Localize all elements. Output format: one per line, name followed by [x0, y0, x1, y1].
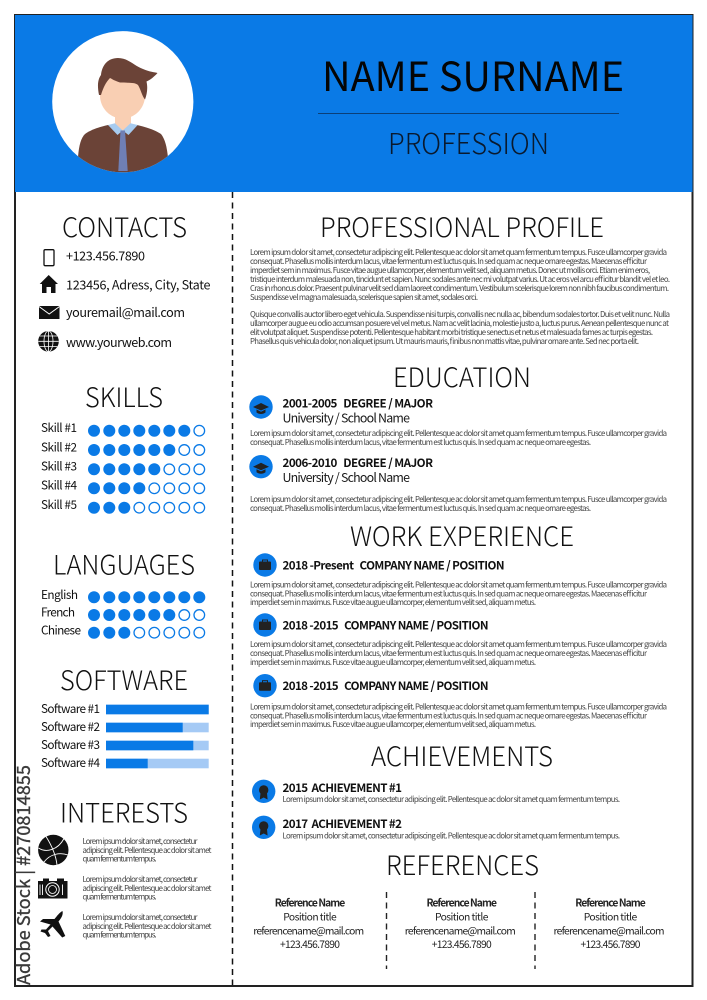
- reference 3: Reference Name: [575, 894, 646, 910]
- reference divider 1: [386, 892, 388, 969]
- job entry 1: consequat. Phasellus mollis interdum lacus, vitae fermentum est luctus quis. In sed quam ac neque ornare egestas. Maecenas efficitur: [250, 588, 648, 600]
- education entry 2: 2006-2010 DEGREE / MAJOR: [282, 455, 433, 471]
- reference 3: [554, 894, 664, 951]
- language rows: Chinese: [41, 622, 81, 638]
- panel: references: [253, 844, 664, 969]
- icon: medal 1: [252, 780, 275, 803]
- reference 1: [253, 894, 364, 951]
- icon: camera: [38, 878, 68, 898]
- education entry 1: 2001-2005 DEGREE / MAJOR: [282, 396, 433, 412]
- achievement 2: [282, 816, 620, 842]
- interest text 2: [82, 874, 212, 902]
- heading: contacts: CONTACTS: [62, 206, 187, 245]
- profile paragraph 1: consequat. Phasellus mollis interdum lacus, vitae fermentum est luctus quis. In sed quam ac neque ornare egestas. Maecenas efficitur: [250, 256, 648, 267]
- job entry 3: Lorem ipsum dolor sit amet, consectetur adipiscing elit. Pellentesque ac dolor sit amet quam fermentum tempus. Fusce ullamcorper gravida: [250, 702, 667, 712]
- interest text 2: adipiscing elit. Pellentesque ac dolor sit amet: [82, 883, 212, 894]
- job entry 2: Lorem ipsum dolor sit amet, consectetur adipiscing elit. Pellentesque ac dolor sit amet quam fermentum tempus. Fusce ullamcorper gravida: [250, 639, 667, 650]
- skill rows: [41, 419, 205, 514]
- panel: header: [15, 15, 692, 192]
- education entry 2: consequat. Phasellus mollis interdum lacus, vitae fermentum est luctus quis. In sed quam ac neque ornare egestas.: [250, 503, 591, 514]
- reference divider 2: [534, 892, 536, 969]
- skill rows: Skill #1: [41, 419, 77, 436]
- skill rows: Skill #5: [41, 496, 77, 513]
- interest text 3: adipiscing elit. Pellentesque ac dolor sit amet: [82, 921, 212, 932]
- achievement 1: Lorem ipsum dolor sit amet, consectetur adipiscing elit. Pellentesque ac dolor sit amet quam fermentum tempus.: [282, 794, 620, 805]
- icon: graduation cap 1: [249, 395, 273, 419]
- education entry 2: University / School Name: [282, 468, 410, 486]
- icon: briefcase 3: [253, 674, 277, 697]
- reference 2: referencename@mail.com: [405, 922, 516, 938]
- reference 3: referencename@mail.com: [554, 922, 664, 938]
- education entry 1: Lorem ipsum dolor sit amet, consectetur adipiscing elit. Pellentesque ac dolor sit amet quam fermentum tempus. Fusce ullamcorper gravida: [250, 428, 667, 439]
- profile paragraph 1: [250, 247, 670, 303]
- icon: graduation cap 2: [249, 455, 273, 478]
- heading: professional profile: PROFESSIONAL PROFILE: [320, 206, 604, 245]
- icon: airplane: [40, 911, 65, 938]
- reference 2: Reference Name: [426, 894, 497, 910]
- interest text 1: [82, 836, 212, 864]
- profile paragraph 1: imperdiet sem in maximus. Fusce vitae augue ullamcorper, elementum velit sed, aliquam metus. Donec ut mollis orci. Etiam enim eros,: [250, 265, 650, 276]
- reference 1: Reference Name: [275, 894, 345, 910]
- reference 3: Position title: [584, 908, 638, 924]
- job entry 2: [250, 618, 667, 668]
- profile paragraph 1: tristique interdum malesuada non, tincidunt et sapien. Nunc sodales ante nec mi volutpat varius. Ut ac eros vel arcu efficitur blandit vel et leo.: [250, 274, 670, 285]
- education entry 2: Lorem ipsum dolor sit amet, consectetur adipiscing elit. Pellentesque ac dolor sit amet quam fermentum tempus. Fusce ullamcorper gravida: [250, 494, 667, 505]
- interest text 1: quam fermentum tempus.: [82, 853, 156, 864]
- heading: interests: INTERESTS: [60, 792, 188, 830]
- heading: work experience: WORK EXPERIENCE: [350, 515, 574, 554]
- panel: contacts: [38, 206, 211, 352]
- education entry 2: [250, 455, 667, 514]
- achievement 1: 2015 ACHIEVEMENT #1: [282, 780, 402, 796]
- education entry 1: University / School Name: [282, 408, 410, 426]
- bar chart: software levels: [41, 700, 209, 771]
- profile paragraph 2: ullamcorper augue eu odio accumsan posuere vel vel metus. Nam ac velit lacinia, molestie justo a, luctus purus. Aenean pellentesque nunc at: [250, 318, 669, 329]
- job entry 3: imperdiet sem in maximus. Fusce vitae augue ullamcorper, elementum velit sed, aliquam metus.: [250, 719, 536, 730]
- skill rows: Skill #3: [41, 458, 77, 474]
- panel: work experience: [250, 515, 667, 730]
- bar chart: software levels: Software #1: [41, 700, 100, 717]
- achievement 2: 2017 ACHIEVEMENT #2: [282, 816, 402, 832]
- bar chart: software levels: Software #3: [41, 736, 100, 753]
- icon: envelope: [39, 306, 60, 319]
- profile paragraph 2: elit volutpat aliquet. Suspendisse potenti. Pellentesque habitant morbi tristique senectus et netus et malesuada fames ac turpis egestas.: [250, 327, 653, 338]
- profession: PROFESSION: [388, 122, 549, 163]
- reference 2: [405, 894, 516, 951]
- skill rows: Skill #4: [41, 476, 77, 494]
- heading: software: SOFTWARE: [60, 659, 188, 698]
- language rows: English: [41, 586, 78, 603]
- job entry 2: consequat. Phasellus mollis interdum lacus, vitae fermentum est luctus quis. In sed quam ac neque ornare egestas. Maecenas efficitur: [250, 648, 648, 659]
- column divider: [232, 192, 234, 985]
- language rows: [41, 586, 205, 639]
- job entry 1: Lorem ipsum dolor sit amet, consectetur adipiscing elit. Pellentesque ac dolor sit amet quam fermentum tempus. Fusce ullamcorper gravida: [250, 580, 667, 590]
- job entry 1: imperdiet sem in maximus. Fusce vitae augue ullamcorper, elementum velit sed, aliquam metus.: [250, 597, 536, 608]
- interest text 3: [82, 912, 212, 940]
- profile paragraph 2: Quisque convallis auctor libero eget vehicula. Suspendisse nisi turpis, convallis nec nulla ac, bibendum sodales tortor. Duis et velit nunc. Nulla: [250, 309, 670, 320]
- icon: basketball: [38, 835, 68, 865]
- reference 1: referencename@mail.com: [253, 922, 364, 938]
- bar chart: software levels: Software #2: [41, 718, 100, 735]
- reference 2: Position title: [435, 908, 489, 924]
- panel: education: [249, 356, 667, 514]
- icon: globe: [38, 331, 59, 352]
- panel: skills: [41, 376, 205, 514]
- job entry 3: 2018 -2015 COMPANY NAME / POSITION: [282, 678, 488, 694]
- job entry 1: [250, 558, 667, 608]
- job entry 3: [250, 678, 667, 730]
- panel: professional profile: [250, 206, 670, 347]
- panel: interests: [38, 792, 212, 940]
- interest text 1: Lorem ipsum dolor sit amet, consectetur: [82, 836, 198, 847]
- reference 1: +123.456.7890: [280, 936, 340, 951]
- heading: achievements: ACHIEVEMENTS: [371, 735, 553, 774]
- achievement 1: [282, 780, 620, 805]
- language rows: French: [41, 604, 75, 620]
- phone number: +123.456.7890: [66, 246, 145, 264]
- interest text 2: quam fermentum tempus.: [82, 891, 156, 902]
- profile paragraph 2: [250, 309, 670, 347]
- job entry 2: imperdiet sem in maximus. Fusce vitae augue ullamcorper, elementum velit sed, aliquam metus.: [250, 657, 536, 668]
- reference 2: +123.456.7890: [432, 936, 492, 951]
- job entry 1: 2018 -Present COMPANY NAME / POSITION: [282, 558, 504, 574]
- education entry 1: consequat. Phasellus mollis interdum lacus, vitae fermentum est luctus quis. In sed quam ac neque ornare egestas.: [250, 437, 591, 448]
- profile paragraph 1: Lorem ipsum dolor sit amet, consectetur adipiscing elit. Pellentesque ac dolor sit amet quam fermentum tempus. Fusce ullamcorper gravida: [250, 247, 667, 258]
- icon: briefcase 2: [253, 613, 277, 637]
- title rule: [318, 113, 619, 114]
- reference 1: Position title: [283, 908, 337, 924]
- profile paragraph 1: Suspendisse vel magna malesuada, scelerisque sapien sit amet, sodales orci.: [250, 292, 478, 303]
- heading: skills: SKILLS: [85, 376, 163, 415]
- profile paragraph 1: Cras in rhoncus dolor. Praesent pulvinar velit sed diam laoreet condimentum. Vestibulum scelerisque lorem non nibh faucibus condimentum.: [250, 283, 669, 294]
- achievement 2: Lorem ipsum dolor sit amet, consectetur adipiscing elit. Pellentesque ac dolor sit amet quam fermentum tempus.: [282, 830, 620, 842]
- icon: medal 2: [252, 816, 275, 839]
- stock credit label: Adobe Stock | #270814855: [10, 765, 36, 985]
- interest text 2: Lorem ipsum dolor sit amet, consectetur: [82, 874, 198, 885]
- interest text 1: adipiscing elit. Pellentesque ac dolor sit amet: [82, 845, 212, 856]
- panel: languages: [41, 544, 205, 639]
- job entry 2: 2018 -2015 COMPANY NAME / POSITION: [282, 618, 488, 634]
- name: NAME SURNAME: [322, 44, 624, 103]
- heading: education: EDUCATION: [393, 356, 531, 395]
- icon: phone: [44, 250, 54, 266]
- address: 123456, Adress, City, State: [66, 274, 211, 294]
- icon: briefcase 1: [253, 553, 277, 577]
- heading: languages: LANGUAGES: [53, 544, 195, 582]
- profile paragraph 2: Phasellus quis vehicula dolor, non aliquet ipsum. Ut mauris mauris, finibus non mattis vitae, pulvinar ornare ante. Sed nec porta elit.: [250, 336, 639, 347]
- website: www.yourweb.com: [66, 332, 172, 351]
- interest text 3: Lorem ipsum dolor sit amet, consectetur: [82, 912, 198, 923]
- job entry 3: consequat. Phasellus mollis interdum lacus, vitae fermentum est luctus quis. In sed quam ac neque ornare egestas. Maecenas efficitur: [250, 710, 648, 722]
- icon: house: [40, 275, 58, 293]
- education entry 1: [250, 396, 667, 448]
- skill rows: Skill #2: [41, 438, 77, 456]
- avatar portrait: [52, 31, 193, 175]
- reference 3: +123.456.7890: [580, 936, 641, 951]
- bar chart: software levels: Software #4: [41, 754, 100, 771]
- panel: software: [41, 659, 209, 771]
- heading: references: REFERENCES: [386, 844, 539, 883]
- interest text 3: quam fermentum tempus.: [82, 929, 156, 940]
- panel: achievements: [252, 735, 620, 842]
- email: youremail@mail.com: [66, 302, 185, 321]
